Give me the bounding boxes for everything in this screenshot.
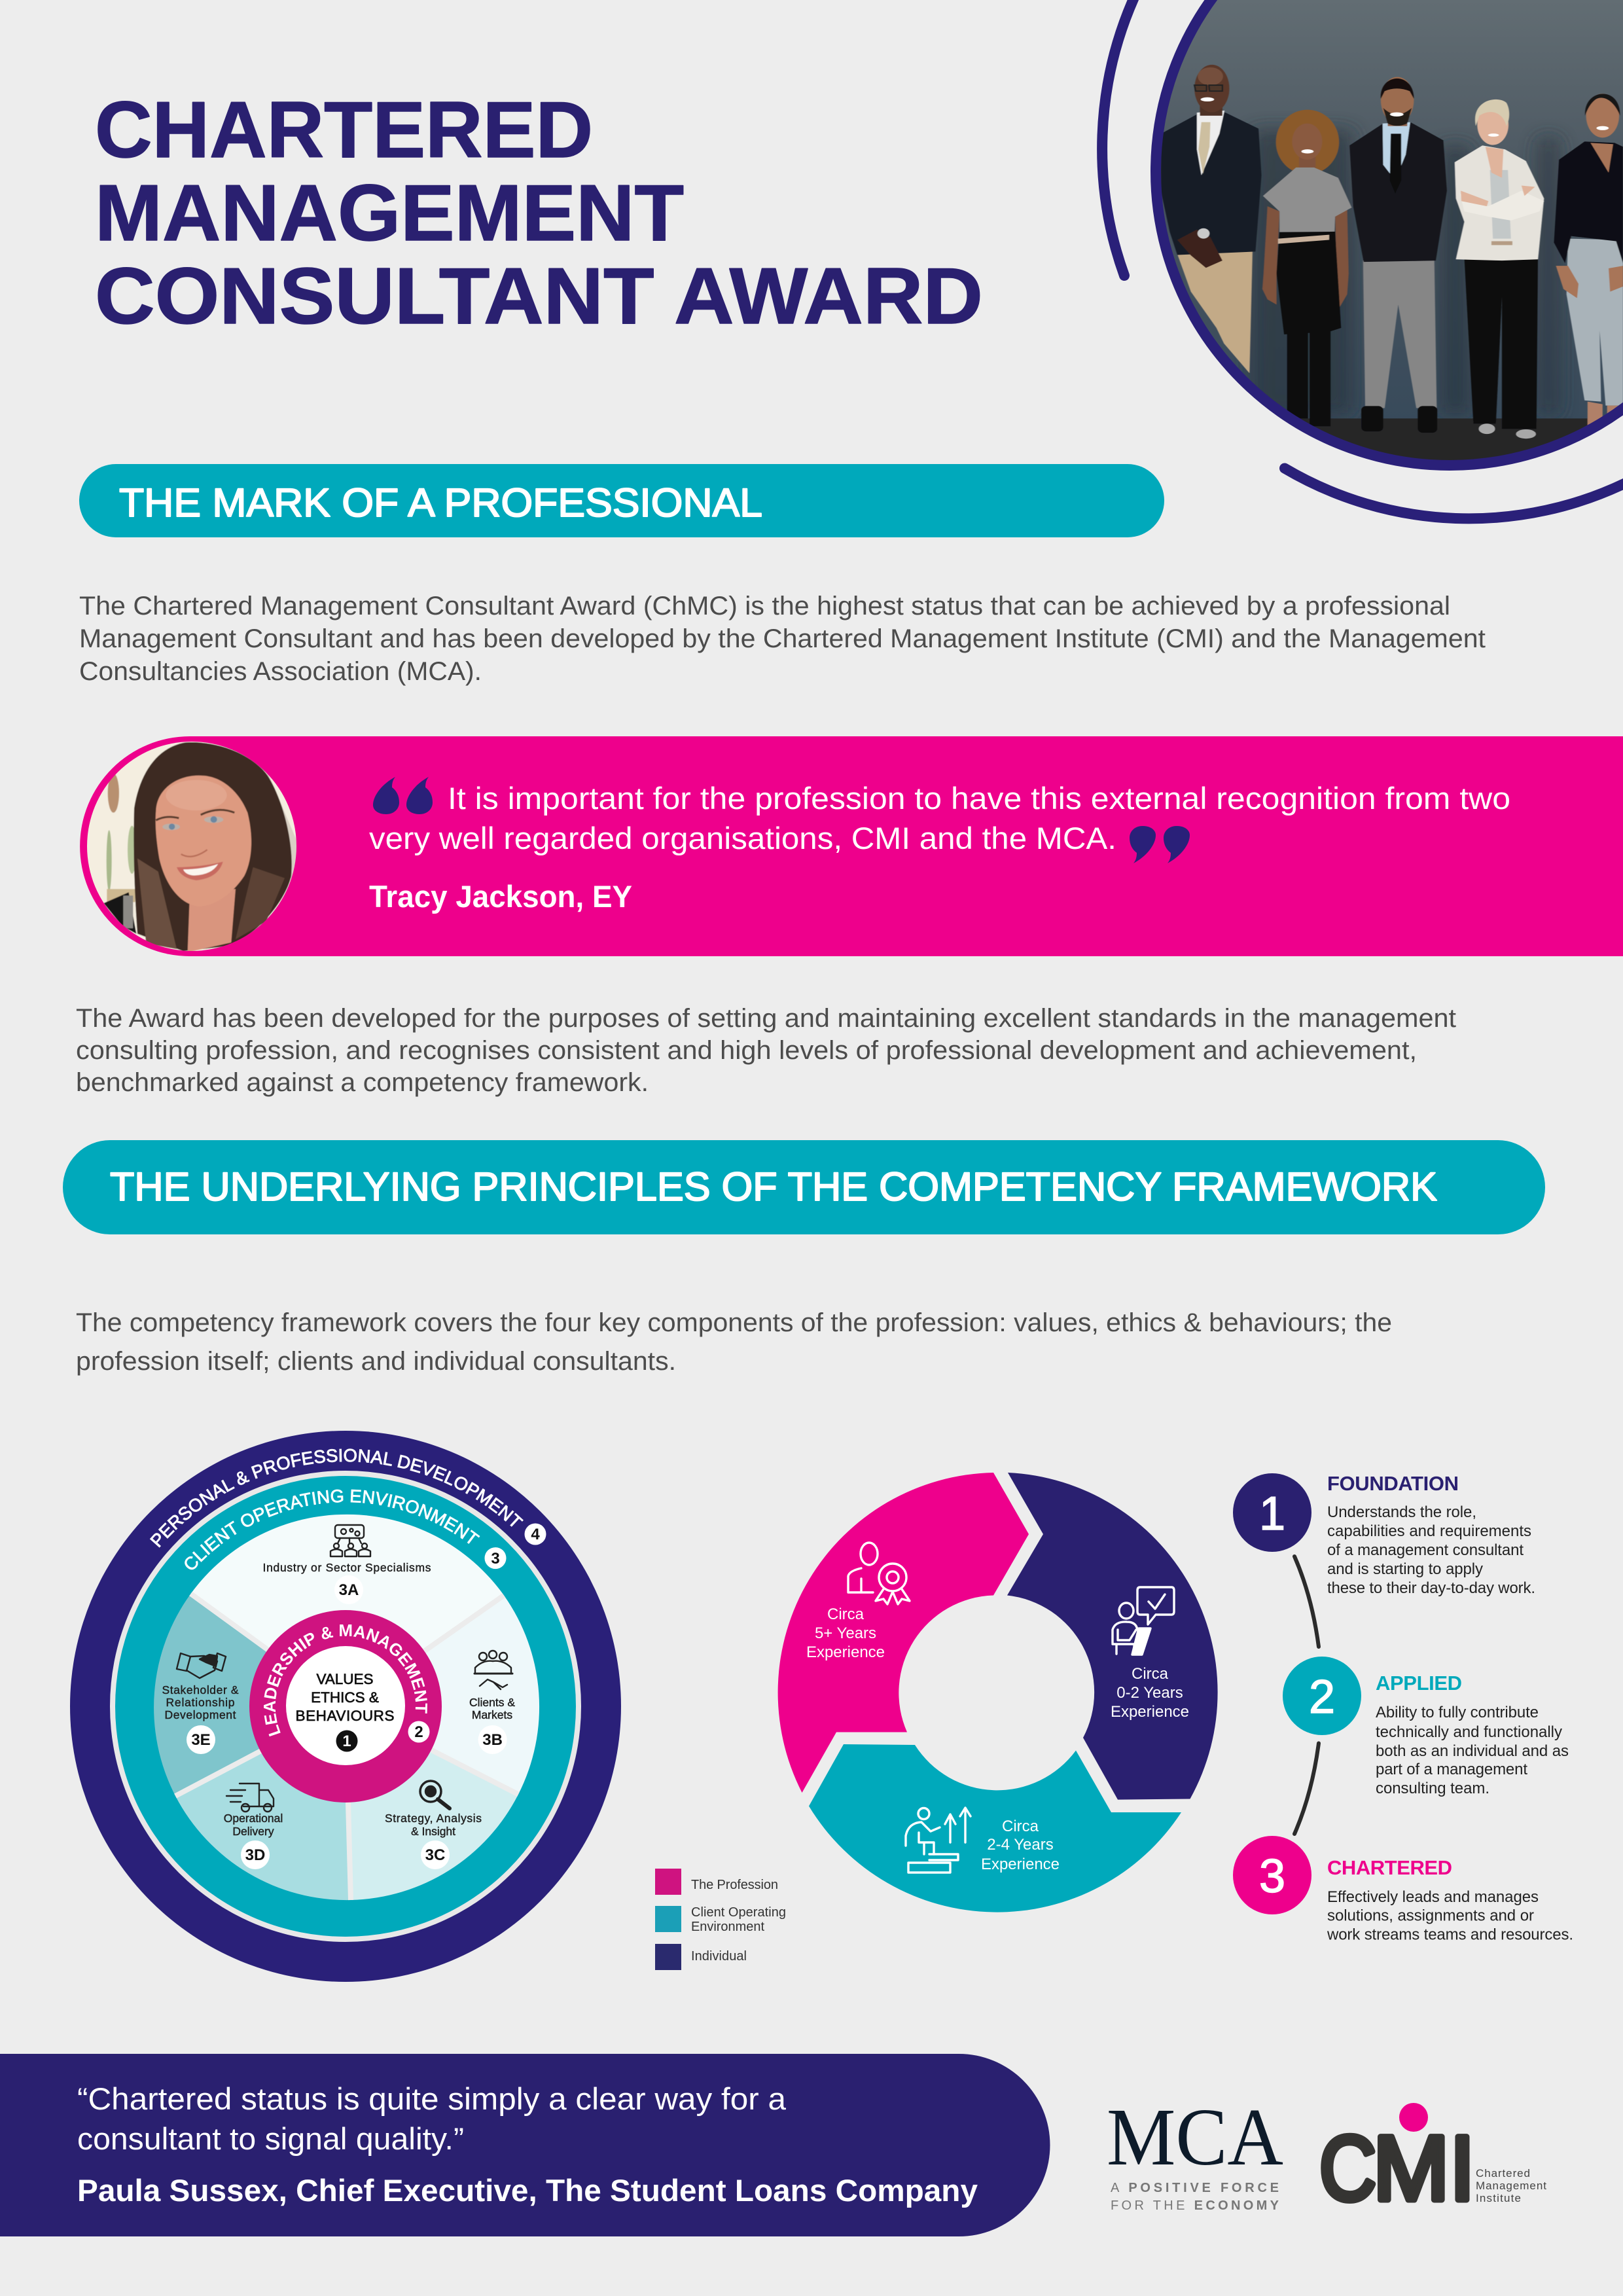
number 3 bbox=[1233, 1836, 1311, 1914]
icon: person climbing books bbox=[906, 1808, 971, 1873]
stage 3: chartered: Effectively leads and manages bbox=[1327, 1888, 1539, 1906]
logo: CMI: Institute bbox=[1476, 2192, 1521, 2204]
framework paragraph bbox=[76, 1308, 1392, 1376]
award paragraph: benchmarked against a competency framework. bbox=[76, 1068, 649, 1097]
badge 3 bbox=[484, 1547, 507, 1569]
title: MANAGEMENT bbox=[95, 168, 684, 257]
segment: 0-2 years: Experience bbox=[1111, 1703, 1189, 1721]
stage 1: foundation: capabilities and requirements bbox=[1327, 1522, 1531, 1540]
person 5 bbox=[1554, 94, 1623, 429]
segment: 5+ years: Experience bbox=[806, 1643, 885, 1661]
framework paragraph: profession itself; clients and individual consultants. bbox=[76, 1347, 676, 1376]
person 1 bbox=[1161, 65, 1262, 373]
intro paragraph: Consultancies Association (MCA). bbox=[79, 657, 482, 686]
badge 2: 2 bbox=[414, 1723, 423, 1741]
3C block: & Insight bbox=[411, 1825, 455, 1838]
3C block: Strategy, Analysis bbox=[385, 1812, 482, 1825]
segment: 2-4 years: 2-4 Years bbox=[987, 1836, 1054, 1854]
closing quote marks bbox=[1130, 826, 1190, 863]
segment: 0-2 years bbox=[1007, 1473, 1218, 1800]
opening quote marks bbox=[373, 777, 433, 814]
intro paragraph bbox=[79, 592, 1486, 686]
heading pill: the mark of a professional: THE MARK OF A PROFESSIONAL bbox=[119, 480, 762, 525]
ring label: leadership and management: LEADERSHIP & MANAGEMENT bbox=[264, 1624, 427, 1737]
heading pill: the mark of a professional bbox=[79, 464, 1164, 537]
icon: clients and markets bbox=[474, 1651, 512, 1689]
segment: 5+ years: Circa bbox=[827, 1605, 865, 1623]
stage 2: applied: APPLIED bbox=[1376, 1672, 1462, 1695]
title: CONSULTANT AWARD bbox=[95, 251, 983, 340]
icon: delivery truck bbox=[226, 1784, 274, 1812]
segment: 0-2 years: Circa bbox=[1132, 1665, 1169, 1683]
logo: CMI: MI bbox=[1373, 2117, 1475, 2219]
number 1 bbox=[1233, 1473, 1311, 1552]
award paragraph: The Award has been developed for the purposes of setting and maintaining excellent standards in the management bbox=[76, 1004, 1456, 1033]
legend: The Profession bbox=[691, 1878, 778, 1892]
segment: 2-4 years: Experience bbox=[981, 1856, 1060, 1873]
logo: CMI: Chartered bbox=[1476, 2167, 1530, 2179]
competency wheel bbox=[70, 1431, 621, 1982]
logo: MCA: A POSITIVE FORCE bbox=[1111, 2181, 1279, 2195]
bottom quote band: Paula Sussex, Chief Executive, The Student Loans Company bbox=[77, 2173, 978, 2208]
3E block: Relationship bbox=[166, 1696, 234, 1709]
icon: handshake bbox=[177, 1653, 226, 1678]
3A block: Industry or Sector Specialisms bbox=[263, 1561, 431, 1574]
pink quote band bbox=[79, 736, 1623, 959]
badge 1 bbox=[336, 1731, 357, 1751]
number 2 bbox=[1283, 1657, 1361, 1735]
centre label: BEHAVIOURS bbox=[296, 1708, 394, 1724]
number 3: 3 bbox=[1259, 1850, 1285, 1903]
logo: CMI: C bbox=[1319, 2117, 1376, 2219]
centre label bbox=[296, 1671, 394, 1724]
stage 3: chartered: work streams teams and resources. bbox=[1327, 1926, 1573, 1944]
stage 1: foundation: of a management consultant bbox=[1327, 1541, 1524, 1559]
3D block: 3D bbox=[245, 1846, 265, 1864]
bottom quote band bbox=[0, 2054, 1050, 2236]
3A block: 3A bbox=[339, 1581, 359, 1599]
segment: 5+ years: 5+ Years bbox=[815, 1624, 876, 1642]
icon: group discussion bbox=[330, 1525, 370, 1556]
badge 4 bbox=[525, 1524, 546, 1545]
bottom quote band: consultant to signal quality.” bbox=[77, 2121, 464, 2156]
stage 3: chartered: solutions, assignments and or bbox=[1327, 1907, 1534, 1924]
3D block: Delivery bbox=[232, 1825, 274, 1838]
icon: person with rosette bbox=[848, 1543, 910, 1604]
career stages donut bbox=[778, 1473, 1218, 1912]
sector 3C bbox=[346, 1706, 518, 1900]
3A block bbox=[263, 1525, 431, 1604]
3C block: 3C bbox=[425, 1846, 445, 1864]
title bbox=[95, 85, 983, 340]
icon: magnifier bbox=[420, 1781, 450, 1808]
badge 1: 1 bbox=[342, 1732, 351, 1750]
stage 2: applied bbox=[1283, 1657, 1569, 1797]
3E block: Stakeholder & bbox=[162, 1683, 239, 1696]
sector 3D bbox=[175, 1706, 351, 1900]
logo: MCA: FOR THE ECONOMY bbox=[1111, 2198, 1279, 2213]
segment: 2-4 years: Circa bbox=[1002, 1818, 1039, 1835]
quote text: It is important for the profession to have this external recognition from two bbox=[448, 781, 1510, 816]
stage 1: foundation: and is starting to apply bbox=[1327, 1560, 1483, 1578]
award paragraph: consulting profession, and recognises consistent and high levels of professional development and achievement, bbox=[76, 1036, 1417, 1065]
title: CHARTERED bbox=[95, 85, 593, 174]
intro paragraph: Management Consultant and has been developed by the Chartered Management Institute (CMI) and the Management bbox=[79, 624, 1486, 653]
3B block bbox=[469, 1651, 515, 1754]
person 3 bbox=[1349, 77, 1447, 433]
3E block: Development bbox=[165, 1708, 236, 1721]
segment: 5+ years bbox=[778, 1473, 1029, 1793]
legend: Client Operating bbox=[691, 1905, 786, 1920]
logo: CMI: Management bbox=[1476, 2179, 1546, 2192]
sector 3A bbox=[191, 1515, 504, 1706]
sector 3E bbox=[154, 1594, 346, 1796]
stage 2: applied: part of a management bbox=[1376, 1761, 1527, 1778]
quote text bbox=[369, 781, 1510, 855]
legend: Individual bbox=[691, 1949, 747, 1964]
stage 3: chartered bbox=[1233, 1836, 1573, 1944]
quote attribution: Tracy Jackson, EY bbox=[369, 879, 632, 914]
number 1: 1 bbox=[1259, 1488, 1285, 1540]
portrait photo bbox=[87, 742, 296, 951]
stage 1: foundation bbox=[1233, 1472, 1535, 1597]
framework paragraph: The competency framework covers the four key components of the profession: values, ethics & behaviours; the bbox=[76, 1308, 1392, 1337]
sector 3B bbox=[346, 1596, 539, 1795]
ring label: personal and professional development: PERSONAL & PROFESSIONAL DEVELOPMENT bbox=[149, 1448, 524, 1548]
badge 2 bbox=[408, 1721, 429, 1742]
heading pill: underlying principles: THE UNDERLYING PRINCIPLES OF THE COMPETENCY FRAMEWORK bbox=[110, 1164, 1437, 1209]
stage 2: applied: Ability to fully contribute bbox=[1376, 1704, 1539, 1721]
legend: Environment bbox=[691, 1920, 764, 1934]
stage 3: chartered: CHARTERED bbox=[1327, 1856, 1452, 1879]
badge 4: 4 bbox=[531, 1526, 540, 1543]
person 4 bbox=[1455, 99, 1544, 439]
quote text: very well regarded organisations, CMI and the MCA. bbox=[369, 821, 1116, 855]
3B block: Clients & bbox=[469, 1696, 515, 1709]
award paragraph bbox=[76, 1004, 1456, 1097]
bottom quote band: “Chartered status is quite simply a clear way for a bbox=[77, 2081, 787, 2116]
decorative arc left bbox=[1102, 0, 1135, 276]
centre ring bbox=[249, 1610, 442, 1803]
legend bbox=[655, 1869, 786, 1970]
badge 3: 3 bbox=[491, 1550, 500, 1568]
3D block: Operational bbox=[224, 1812, 283, 1825]
segment: 0-2 years: 0-2 Years bbox=[1116, 1684, 1183, 1702]
3B block: Markets bbox=[472, 1708, 512, 1721]
stage 2: applied: both as an individual and as bbox=[1376, 1742, 1569, 1760]
logo: CMI bbox=[1319, 2103, 1546, 2219]
intro paragraph: The Chartered Management Consultant Award (ChMC) is the highest status that can be achieved by a professional bbox=[79, 592, 1450, 620]
3C block bbox=[385, 1781, 482, 1869]
number 2: 2 bbox=[1309, 1671, 1335, 1723]
connector 2 to 3 bbox=[1294, 1744, 1319, 1834]
logo: MCA: MCA bbox=[1107, 2092, 1283, 2183]
stage 1: foundation: these to their day-to-day work. bbox=[1327, 1579, 1535, 1597]
stage 2: applied: consulting team. bbox=[1376, 1780, 1489, 1797]
ring label: client operating environment: CLIENT OPERATING ENVIRONMENT bbox=[185, 1490, 480, 1570]
segment: 2-4 years bbox=[809, 1744, 1181, 1912]
connector 1 to 2 bbox=[1294, 1556, 1319, 1647]
stage 1: foundation: FOUNDATION bbox=[1327, 1472, 1459, 1495]
decorative arc bottom bbox=[1285, 469, 1623, 518]
3D block bbox=[224, 1784, 283, 1869]
centre label: ETHICS & bbox=[311, 1689, 379, 1706]
person 2 bbox=[1262, 110, 1351, 426]
icon: person with speech bubble bbox=[1113, 1587, 1174, 1655]
team photo in circular frame bbox=[1150, 0, 1623, 471]
stage 2: applied: technically and functionally bbox=[1376, 1723, 1562, 1741]
centre label: VALUES bbox=[316, 1671, 374, 1687]
3E block bbox=[162, 1653, 239, 1754]
3B block: 3B bbox=[482, 1731, 503, 1749]
heading pill: underlying principles bbox=[63, 1140, 1545, 1234]
stage 1: foundation: Understands the role, bbox=[1327, 1503, 1476, 1521]
3E block: 3E bbox=[191, 1731, 211, 1749]
